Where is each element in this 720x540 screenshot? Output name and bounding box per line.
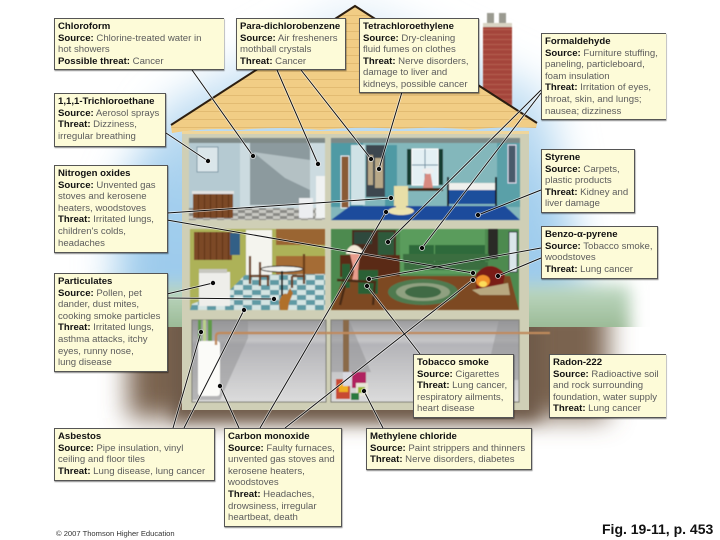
callout: Benzo-a-pyrene: Threat: Lung cancer bbox=[545, 264, 633, 275]
callout: Benzo-a-pyrene: Source: Tobacco smoke, bbox=[545, 241, 653, 252]
copyright note: © 2007 Thomson Higher Education bbox=[56, 529, 175, 538]
callout: Particulates: cooking smoke particles bbox=[58, 311, 160, 322]
callout: Nitrogen oxides: heaters, woodstoves bbox=[58, 203, 146, 214]
callout: Methylene chloride bbox=[366, 428, 532, 470]
callout: Nitrogen oxides: stoves and kerosene bbox=[58, 191, 147, 202]
callout: Particulates: Threat: Irritated lungs, bbox=[58, 322, 154, 333]
room: bedroom bbox=[331, 138, 520, 220]
background: lawn bbox=[168, 278, 640, 327]
callout: Formaldehyde: paneling, particleboard, bbox=[545, 59, 645, 70]
callout: Radon-222 bbox=[549, 354, 666, 418]
callout: Radon-222: foundation, water supply bbox=[553, 392, 657, 403]
callout: Asbestos: Source: Pipe insulation, vinyl bbox=[58, 443, 183, 454]
callout: Para-dichlorobenzene: Para-dichlorobenzene bbox=[240, 21, 340, 32]
callout: Methylene chloride: Source: Paint strippers and thinners bbox=[370, 443, 525, 454]
callout: Formaldehyde: Threat: Irritation of eyes, bbox=[545, 82, 651, 93]
callout: Chloroform: Possible threat: Cancer bbox=[58, 56, 164, 67]
callout: Styrene: plastic products bbox=[545, 175, 612, 186]
leader lines: white halo bbox=[166, 70, 541, 428]
callout: Formaldehyde: throat, skin, and lungs; bbox=[545, 94, 642, 105]
callout: Carbon monoxide: heartbeat, death bbox=[228, 512, 298, 523]
background: sky glow bbox=[115, 0, 590, 320]
callout: Methylene chloride: Threat: Nerve disorders, diabetes bbox=[370, 454, 514, 465]
figure caption: Fig. 19-11, p. 453 bbox=[602, 521, 713, 537]
callout: Styrene: Threat: Kidney and bbox=[545, 187, 628, 198]
callout: Particulates: Particulates bbox=[58, 276, 112, 287]
callout: Formaldehyde: Formaldehyde bbox=[545, 36, 611, 47]
callout: Nitrogen oxides: headaches bbox=[58, 238, 105, 249]
callout: Tobacco smoke bbox=[413, 354, 514, 418]
background: soil bbox=[128, 300, 608, 420]
callout: Para-dichlorobenzene bbox=[236, 18, 346, 70]
callout: Methylene chloride: Methylene chloride bbox=[370, 431, 457, 442]
callout: Formaldehyde: nausea; dizziness bbox=[545, 106, 621, 117]
callout: Formaldehyde bbox=[541, 33, 666, 120]
callout: Particulates: dander, dust mites, bbox=[58, 299, 139, 310]
callout: Carbon monoxide: unvented gas stoves and bbox=[228, 454, 335, 465]
callout: 1,1,1-Trichloroethane bbox=[54, 93, 166, 147]
callout: Radon-222: Source: Radioactive soil bbox=[553, 369, 659, 380]
callout: Tetrachloroethylene: damage to liver and bbox=[363, 67, 447, 78]
callout: 1,1,1-Trichloroethane: irregular breathing bbox=[58, 131, 136, 142]
callout: Nitrogen oxides bbox=[54, 165, 168, 253]
illustration: house cross-section with pollutant leader lines bbox=[89, 0, 640, 439]
callout: Carbon monoxide: kerosene heaters, bbox=[228, 466, 305, 477]
callout: Particulates: asthma attacks, itchy bbox=[58, 334, 148, 345]
callout: Tetrachloroethylene: Threat: Nerve disorders, bbox=[363, 56, 469, 67]
callout: Asbestos: ceiling and floor tiles bbox=[58, 454, 145, 465]
callout: Para-dichlorobenzene: Source: Air fresheners bbox=[240, 33, 338, 44]
callout: Carbon monoxide: Threat: Headaches, bbox=[228, 489, 314, 500]
callout: Particulates: Source: Pollen, pet bbox=[58, 288, 142, 299]
callout: Nitrogen oxides: Threat: Irritated lungs, bbox=[58, 214, 154, 225]
callout: Formaldehyde: Source: Furniture stuffing, bbox=[545, 48, 658, 59]
callout: Chloroform: Chloroform bbox=[58, 21, 110, 32]
roof bbox=[171, 6, 537, 133]
callout: Benzo-a-pyrene bbox=[541, 226, 658, 279]
room: bathroom bbox=[189, 138, 325, 220]
callout: Carbon monoxide: woodstoves bbox=[228, 477, 279, 488]
callout: Chloroform: hot showers bbox=[58, 44, 110, 55]
callout: Styrene: liver damage bbox=[545, 198, 600, 209]
callout: Benzo-a-pyrene: woodstoves bbox=[545, 252, 596, 263]
callout: Formaldehyde: foam insulation bbox=[545, 71, 610, 82]
callout: Carbon monoxide bbox=[224, 428, 342, 527]
callout: Para-dichlorobenzene: mothball crystals bbox=[240, 44, 311, 55]
callout: Tetrachloroethylene bbox=[359, 18, 479, 93]
callout: Asbestos: Asbestos bbox=[58, 431, 101, 442]
callout: Asbestos bbox=[54, 428, 215, 481]
callout: Tobacco smoke: Threat: Lung cancer, bbox=[417, 380, 507, 391]
chimney bbox=[483, 13, 512, 108]
callout: Styrene: Source: Carpets, bbox=[545, 164, 620, 175]
callout: Asbestos: Threat: Lung disease, lung cancer bbox=[58, 466, 205, 477]
callout: Tetrachloroethylene: kidneys, possible cancer bbox=[363, 79, 468, 90]
room: living room bbox=[331, 229, 519, 310]
callout: Tobacco smoke: Tobacco smoke bbox=[417, 357, 489, 368]
leader dots bbox=[198, 154, 500, 394]
house shell bbox=[182, 131, 529, 410]
callout: Particulates: lung disease bbox=[58, 357, 112, 368]
room: basement left bbox=[192, 320, 326, 402]
callout: 1,1,1-Trichloroethane: Threat: Dizziness, bbox=[58, 119, 137, 130]
callout: Styrene: Styrene bbox=[545, 152, 580, 163]
leader lines: black bbox=[166, 70, 541, 428]
callout: Radon-222: Threat: Lung cancer bbox=[553, 403, 641, 414]
callout: 1,1,1-Trichloroethane: Source: Aerosol sprays bbox=[58, 108, 159, 119]
callout: Tetrachloroethylene: Tetrachloroethylene bbox=[363, 21, 454, 32]
callout: Benzo-a-pyrene: Benzo-α-pyrene bbox=[545, 229, 618, 240]
callout: Tobacco smoke: Source: Cigarettes bbox=[417, 369, 499, 380]
callout: Tobacco smoke: heart disease bbox=[417, 403, 475, 414]
callout: Radon-222: and rock surrounding bbox=[553, 380, 643, 391]
callout: 1,1,1-Trichloroethane: 1,1,1-Trichloroethane bbox=[58, 96, 154, 107]
callout: Particulates bbox=[54, 273, 168, 372]
room: kitchen bbox=[190, 229, 325, 310]
callout: Tetrachloroethylene: Source: Dry-cleaning bbox=[363, 33, 455, 44]
callout: Carbon monoxide: drowsiness, irregular bbox=[228, 501, 317, 512]
callout: Styrene bbox=[541, 149, 635, 213]
callout: Nitrogen oxides: Nitrogen oxides bbox=[58, 168, 130, 179]
room: basement right bbox=[326, 320, 550, 402]
callout: Carbon monoxide: Carbon monoxide bbox=[228, 431, 310, 442]
callout: Radon-222: Radon-222 bbox=[553, 357, 602, 368]
callout: Chloroform: Source: Chlorine-treated water in bbox=[58, 33, 201, 44]
callout: Tetrachloroethylene: fluid fumes on clothes bbox=[363, 44, 456, 55]
callout: Particulates: eyes, runny nose, bbox=[58, 346, 134, 357]
callout: Nitrogen oxides: children's colds, bbox=[58, 226, 126, 237]
callout: Chloroform bbox=[54, 18, 224, 70]
callout: Nitrogen oxides: Source: Unvented gas bbox=[58, 180, 156, 191]
callout: Tobacco smoke: respiratory ailments, bbox=[417, 392, 503, 403]
callout: Para-dichlorobenzene: Threat: Cancer bbox=[240, 56, 306, 67]
callout: Carbon monoxide: Source: Faulty furnaces, bbox=[228, 443, 335, 454]
